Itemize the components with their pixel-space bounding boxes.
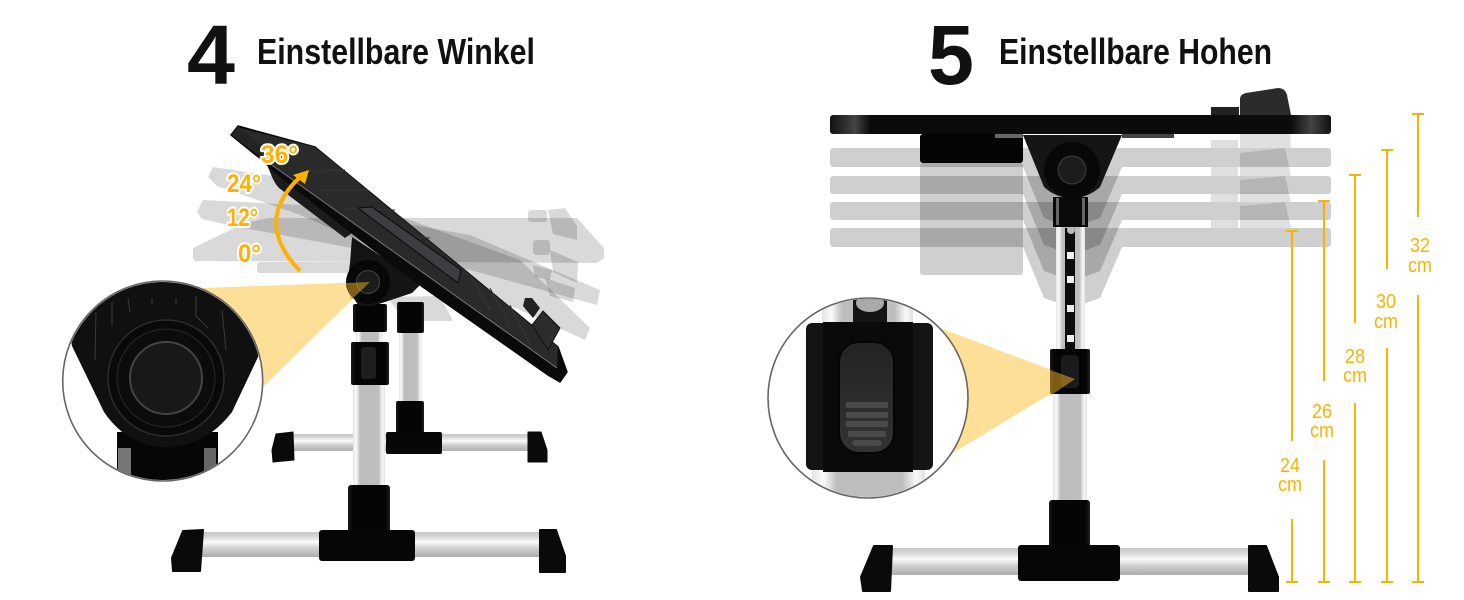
dimension label: 28 cm: cm [1343,365,1367,387]
callout cone: left, pivot [203,282,370,387]
angle labels: 0° [238,240,261,268]
angle labels: 36° [261,141,298,169]
stand: right table [861,226,1278,591]
angle labels: 24° [227,170,261,198]
dimension label: 28 cm [1343,346,1367,387]
callout cone: right, clamp [940,328,1075,453]
zoom circle: pivot knob [60,275,270,482]
dimension lines and labels [1286,114,1424,582]
dimension label: 30 cm [1374,291,1398,333]
dimension label: 28 cm: 28 [1345,346,1365,368]
dimension label: 26 cm: cm [1310,420,1334,442]
heading: 5 Einstellbare Hohen: Einstellbare Hohen [999,31,1272,72]
angle labels [227,141,298,268]
dimension label: 30 cm: 30 [1376,291,1396,313]
heading: 5 Einstellbare Hohen: 5 [928,8,974,102]
heading: 4 Einstellbare Winkel: Einstellbare Winkel [257,31,535,72]
tilted table board [231,126,567,382]
dimension label: 24 cm: cm [1278,474,1302,496]
heading: 4 Einstellbare Winkel: 4 [187,8,235,102]
table board: top position [830,88,1331,227]
heading: 4 Einstellbare Winkel [187,8,535,102]
angle labels: 12° [227,204,258,232]
dimension label: 24 cm: 24 [1280,455,1300,477]
dimension label: 26 cm: 26 [1312,401,1332,423]
ghost boards: height positions [830,134,1331,308]
dimension label: 30 cm: cm [1374,311,1398,333]
arrow: tilt direction [276,170,309,271]
zoom circle: height clamp [768,294,968,500]
callout cone overlay on clamp [1050,370,1075,396]
dimension label: 26 cm [1310,401,1334,442]
dimension label: 32 cm: cm [1408,255,1432,277]
dimension label: 32 cm [1408,235,1432,277]
dimension label: 24 cm [1278,455,1302,496]
back stand: left table [272,302,547,462]
callout cone overlay on pivot [346,282,370,300]
front stand: left table [172,304,565,572]
ghost boards: tilt positions [193,167,604,340]
dimension label: 32 cm: 32 [1410,235,1430,257]
heading: 5 Einstellbare Hohen [928,8,1272,102]
